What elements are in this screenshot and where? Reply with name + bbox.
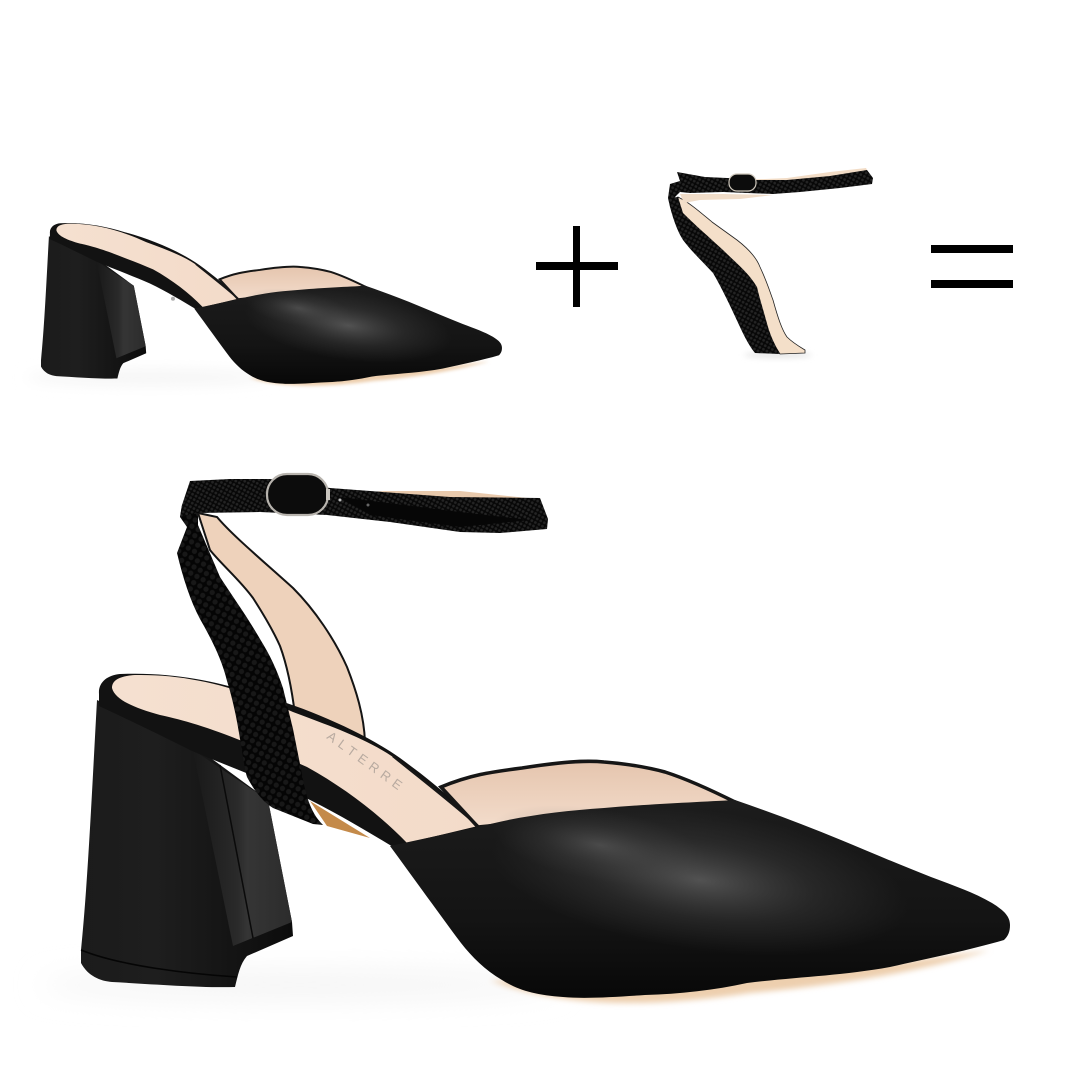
insole logo: ALTERRE	[324, 728, 409, 796]
icon: plus sign	[536, 226, 618, 307]
icon: equals sign	[931, 245, 1013, 288]
insole and welt	[99, 674, 480, 848]
textured slanted strap	[177, 505, 323, 825]
ankle strap	[180, 474, 548, 533]
inner collar lining	[441, 761, 735, 827]
small mule shoe	[26, 223, 502, 386]
block heel	[81, 700, 293, 987]
pointed toe vamp	[390, 781, 1010, 998]
back sling lining	[198, 513, 365, 742]
buckle	[729, 174, 756, 191]
large shoe with strap attached	[40, 474, 1010, 1003]
buckle	[267, 474, 370, 515]
detachable ankle strap	[668, 168, 873, 358]
floor shadow	[40, 950, 990, 1003]
